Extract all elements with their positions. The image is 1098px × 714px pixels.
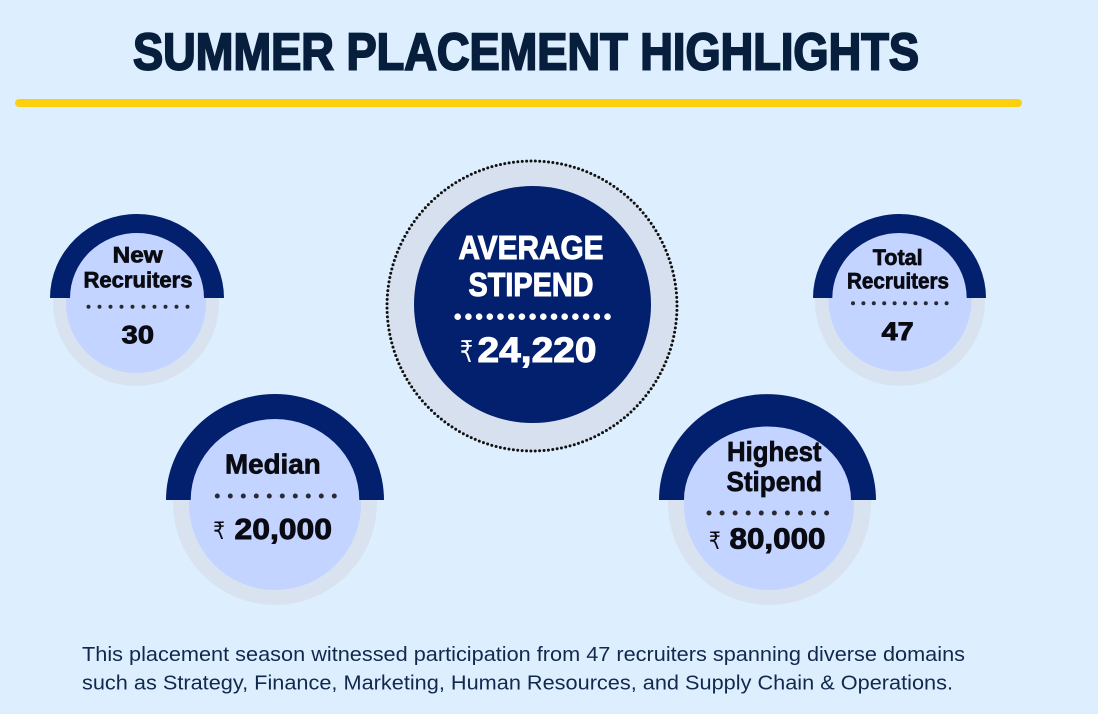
inner circle [66,233,206,373]
label: new recruiters: New [113,242,164,268]
value: 24,220: 24,220 [478,331,596,370]
footer description: This placement season witnessed participation from 47 recruiters spanning diverse domains [82,643,965,666]
value: 20,000: 20,000 [234,514,332,546]
value: 80,000: 80,000 [730,524,826,556]
dotted divider [217,494,335,498]
title: SUMMER PLACEMENT HIGHLIGHTS [133,24,919,82]
panel: average stipend [387,161,677,451]
dotted divider [88,305,188,309]
value: 20,000: ₹ [213,517,225,545]
backing circle [815,216,985,386]
heading: average stipend [458,229,604,303]
label: total recruiters: Total [873,245,923,270]
navy arc [50,214,224,298]
dotted outer ring [387,161,677,451]
navy disc [414,186,651,423]
label: median: Median [225,448,321,479]
footer description [82,643,965,694]
dotted divider [709,510,827,516]
backing circle [668,402,871,605]
inner circle [828,228,972,372]
label: highest stipend: Stipend [726,466,822,497]
inner circle [189,418,361,590]
label: total recruiters: Recruiters [847,269,949,294]
value: 80,000: ₹ [709,527,721,555]
footer description: such as Strategy, Finance, Marketing, Human Resources, and Supply Chain & Operations. [82,672,953,694]
panel: median [166,394,384,605]
dotted divider [853,301,947,305]
label: highest stipend: Highest [727,436,822,467]
panel: highest stipend [659,394,876,605]
navy arc [166,394,384,500]
backing circle [173,401,377,605]
backing circle [53,220,219,386]
heading: average stipend: STIPEND [468,266,594,303]
title underline [15,99,1022,107]
value: 30: 30 [122,322,154,350]
inner circle [684,420,854,590]
navy arc [813,214,986,298]
label: new recruiters: Recruiters [84,268,192,293]
panel: total recruiters [813,214,986,386]
dotted divider [458,313,608,320]
value: 47: 47 [882,318,914,346]
label: new recruiters [84,242,192,293]
label: total recruiters [847,245,949,294]
panel: new recruiters [50,214,224,386]
navy arc [659,394,876,500]
value: 24,220: ₹ [460,335,473,370]
heading: average stipend: AVERAGE [458,229,604,266]
label: highest stipend [726,436,822,497]
